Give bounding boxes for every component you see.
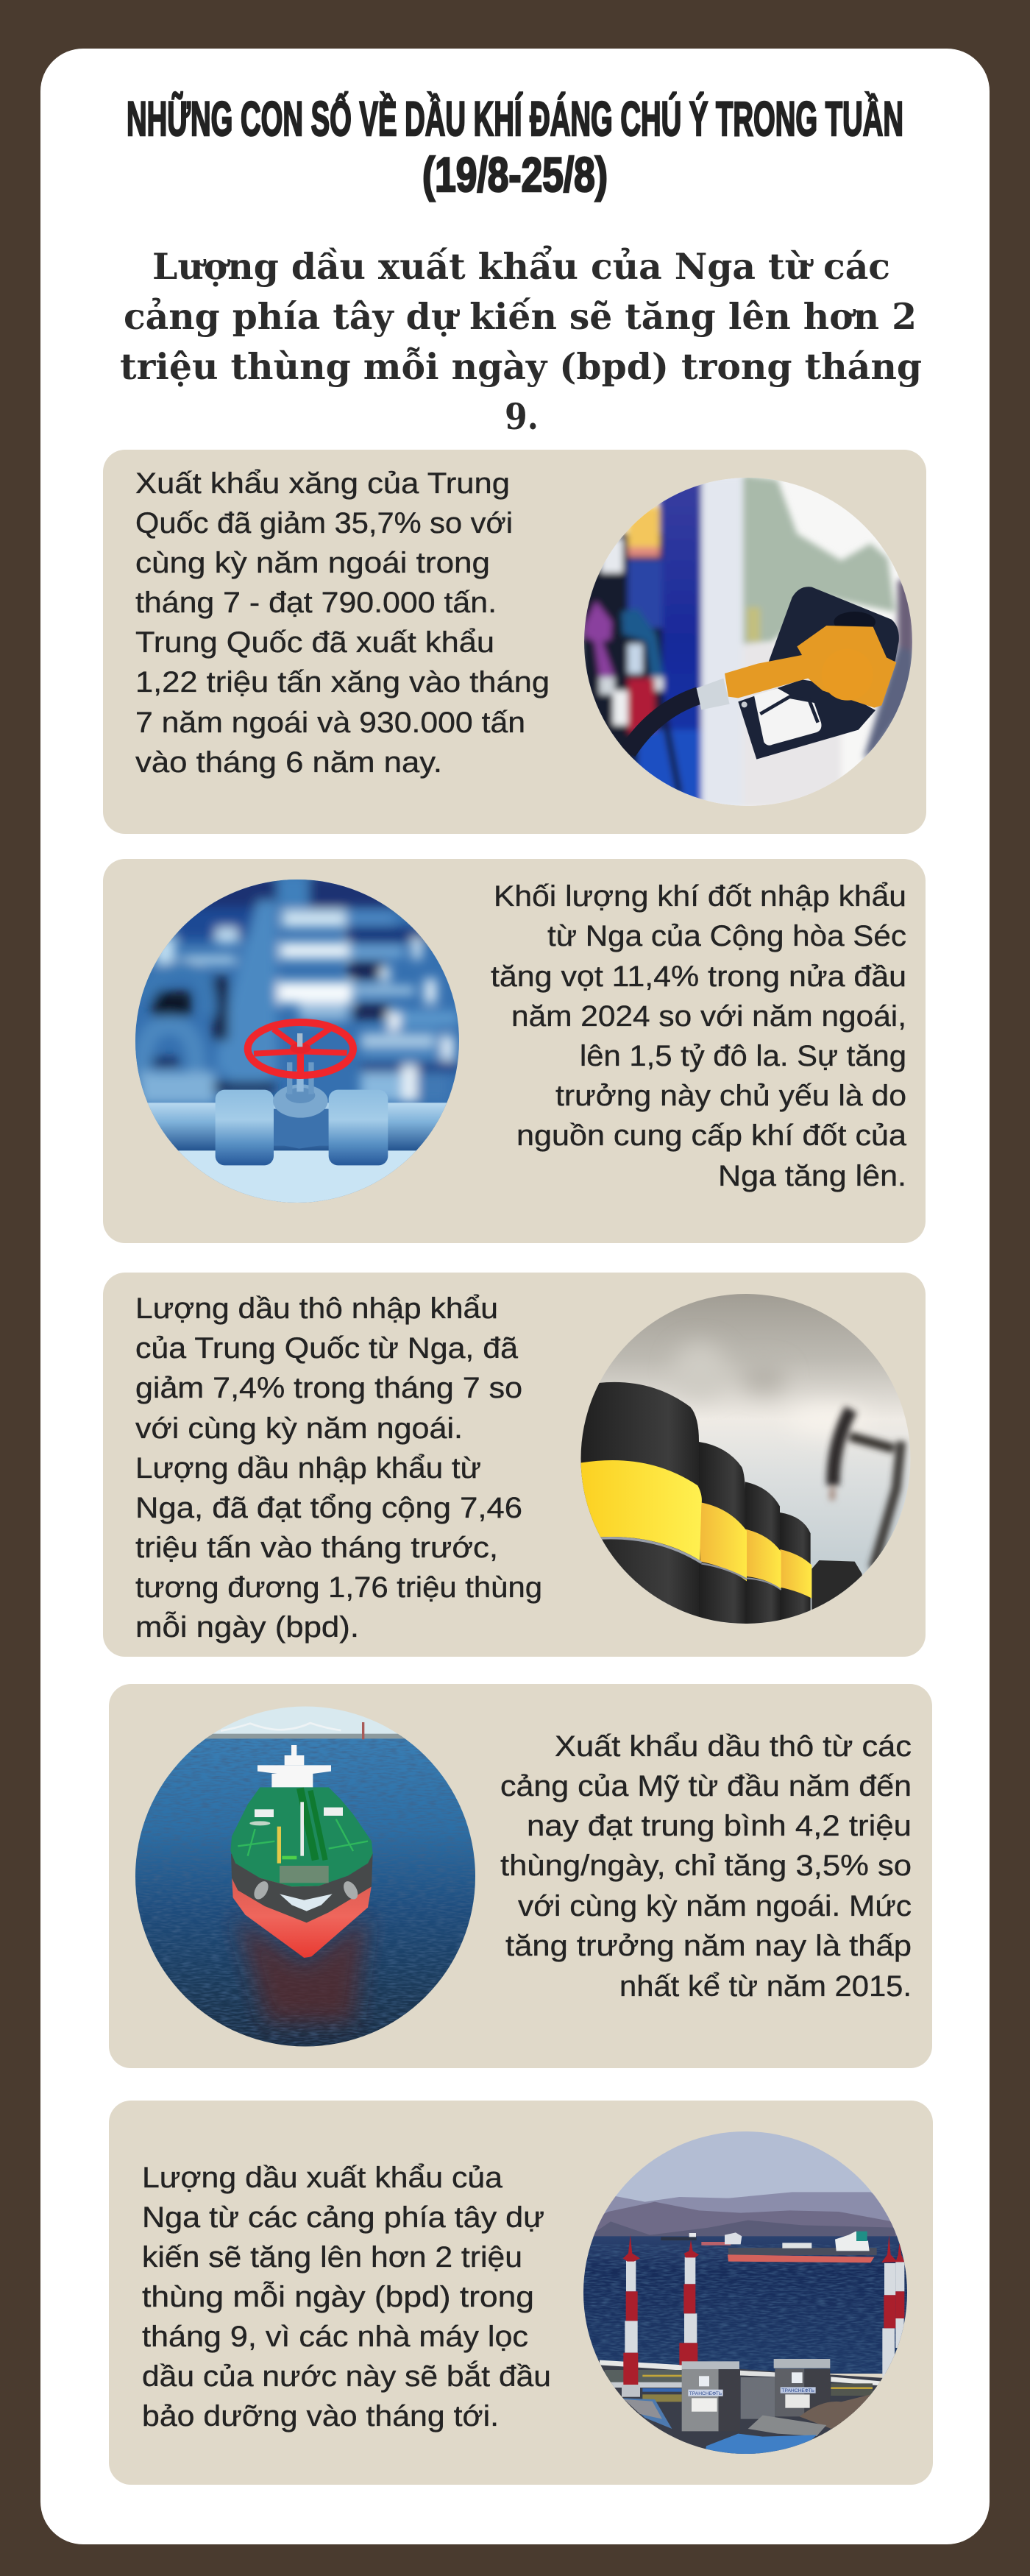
photo: red valve on blue pipeline [132, 876, 464, 1207]
text: China gasoline exports: cùng kỳ năm ngoái trong [135, 547, 490, 579]
text: US crude exports: nay đạt trung bình 4,2 triệu [527, 1810, 912, 1842]
text: Czech gas imports: nguồn cung cấp khí đốt của [516, 1119, 907, 1152]
text: Czech gas imports [491, 880, 907, 1192]
text: China gasoline exports: Xuất khẩu xăng của Trung [135, 467, 510, 500]
text: China crude imports: tương đương 1,76 triệu thùng [135, 1571, 542, 1604]
text: China crude imports: giảm 7,4% trong tháng 7 so [135, 1372, 522, 1404]
storage tanks [682, 2359, 830, 2431]
subtitle: Lượng dầu xuất khẩu của Nga từ các [152, 245, 890, 288]
main tanker [728, 2232, 877, 2262]
subtitle [120, 245, 922, 438]
text: US crude exports: cảng của Mỹ từ đầu năm đến [500, 1770, 912, 1802]
text: Czech gas imports: trưởng này chủ yếu là do [555, 1080, 906, 1112]
text: China crude imports [135, 1292, 542, 1643]
text: China gasoline exports: 1,22 triệu tấn xăng vào tháng [135, 666, 550, 698]
text: China gasoline exports [135, 467, 550, 779]
photo: oil tanker at sea [132, 1704, 478, 2050]
terminal ground [598, 2360, 883, 2454]
tanker deck [230, 1787, 373, 1886]
text: China crude imports: triệu tấn vào tháng trước, [135, 1532, 498, 1564]
text: US crude exports: nhất kể từ năm 2015. [619, 1970, 912, 2003]
text: China gasoline exports: tháng 7 - đạt 790.000 tấn. [135, 587, 497, 619]
photo: oil terminal with tanker [581, 2127, 912, 2458]
text: Czech gas imports: năm 2024 so với năm ngoái, [511, 1000, 906, 1033]
distant ships [661, 2232, 742, 2246]
text: China crude imports: Lượng dầu thô nhập khẩu [135, 1292, 498, 1325]
panel: China crude imports from Russia [103, 1273, 926, 1657]
photo: oil barrels and pump jack [578, 1292, 913, 1627]
barrel 5 [811, 1560, 862, 1610]
text: Czech gas imports: tăng vọt 11,4% trong nửa đầu [491, 960, 906, 993]
panel: Russian western port exports [109, 2101, 933, 2485]
title [127, 91, 903, 202]
text: China crude imports: Nga, đã đạt tổng cộng 7,46 [135, 1492, 522, 1524]
text: Russian western port exports: Lượng dầu xuất khẩu của [142, 2162, 503, 2194]
text: Czech gas imports: từ Nga của Cộng hòa Séc [547, 920, 906, 952]
text: China crude imports: Lượng dầu nhập khẩu từ [135, 1452, 481, 1485]
text: US crude exports: Xuất khẩu dầu thô từ các [555, 1730, 912, 1763]
text: US crude exports: thùng/ngày, chỉ tăng 3,5% so [500, 1850, 912, 1882]
panel: US crude exports [109, 1684, 932, 2068]
text: Russian western port exports [142, 2162, 551, 2432]
storage tanks: ТРАНСНЕФТЬ [689, 2391, 722, 2396]
photo: fuel nozzle at gas pump [581, 475, 914, 808]
text: Czech gas imports: Nga tăng lên. [718, 1160, 906, 1192]
storage tanks: ТРАНСНЕФТЬ [781, 2388, 815, 2393]
panel: Czech gas imports [103, 859, 926, 1243]
text: US crude exports [500, 1730, 912, 2003]
text: Russian western port exports: dầu của nước này sẽ bắt đầu [142, 2360, 551, 2393]
barrel 2 [699, 1442, 747, 1627]
text: US crude exports: tăng trưởng năm nay là thấp [505, 1930, 912, 1962]
barrel 1 [578, 1382, 781, 1627]
bow emblem [280, 1894, 333, 1911]
towers [625, 2257, 904, 2379]
subtitle: 9. [505, 395, 539, 438]
superstructure [258, 1745, 331, 1787]
text: China crude imports: với cùng kỳ năm ngoái. [135, 1412, 463, 1445]
text: Czech gas imports: lên 1,5 tỷ đô la. Sự tăng [580, 1040, 906, 1072]
barrel 3 [745, 1482, 781, 1627]
text: China crude imports: mỗi ngày (bpd). [135, 1610, 359, 1643]
barrel 4 [780, 1512, 811, 1627]
subtitle: cảng phía tây dự kiến sẽ tăng lên hơn 2 [124, 295, 917, 338]
tanker hull [232, 1875, 372, 1958]
text: Russian western port exports: bảo dưỡng vào tháng tới. [142, 2400, 499, 2432]
text: China gasoline exports: 7 năm ngoái và 930.000 tấn [135, 707, 525, 739]
anchors [254, 1881, 269, 1899]
title: (19/8-25/8) [422, 147, 608, 202]
text: Russian western port exports: thùng mỗi ngày (bpd) trong [142, 2280, 534, 2313]
text: Czech gas imports: Khối lượng khí đốt nhập khẩu [494, 880, 906, 913]
text: China gasoline exports: vào tháng 6 năm nay. [135, 746, 442, 779]
text: China gasoline exports: Trung Quốc đã xuất khẩu [135, 626, 494, 659]
subtitle: triệu thùng mỗi ngày (bpd) trong tháng [120, 345, 922, 388]
text: Russian western port exports: kiến sẽ tăng lên hơn 2 triệu [142, 2241, 522, 2274]
panel: China gasoline exports [103, 450, 926, 834]
text: Russian western port exports: tháng 9, vì các nhà máy lọc [142, 2321, 528, 2353]
text: China gasoline exports: Quốc đã giảm 35,7% so với [135, 507, 513, 539]
text: China crude imports: của Trung Quốc từ Nga, đã [135, 1332, 519, 1365]
text: US crude exports: với cùng kỳ năm ngoái. Mức [518, 1890, 912, 1922]
text: Russian western port exports: Nga từ các cảng phía tây dự [142, 2201, 544, 2234]
